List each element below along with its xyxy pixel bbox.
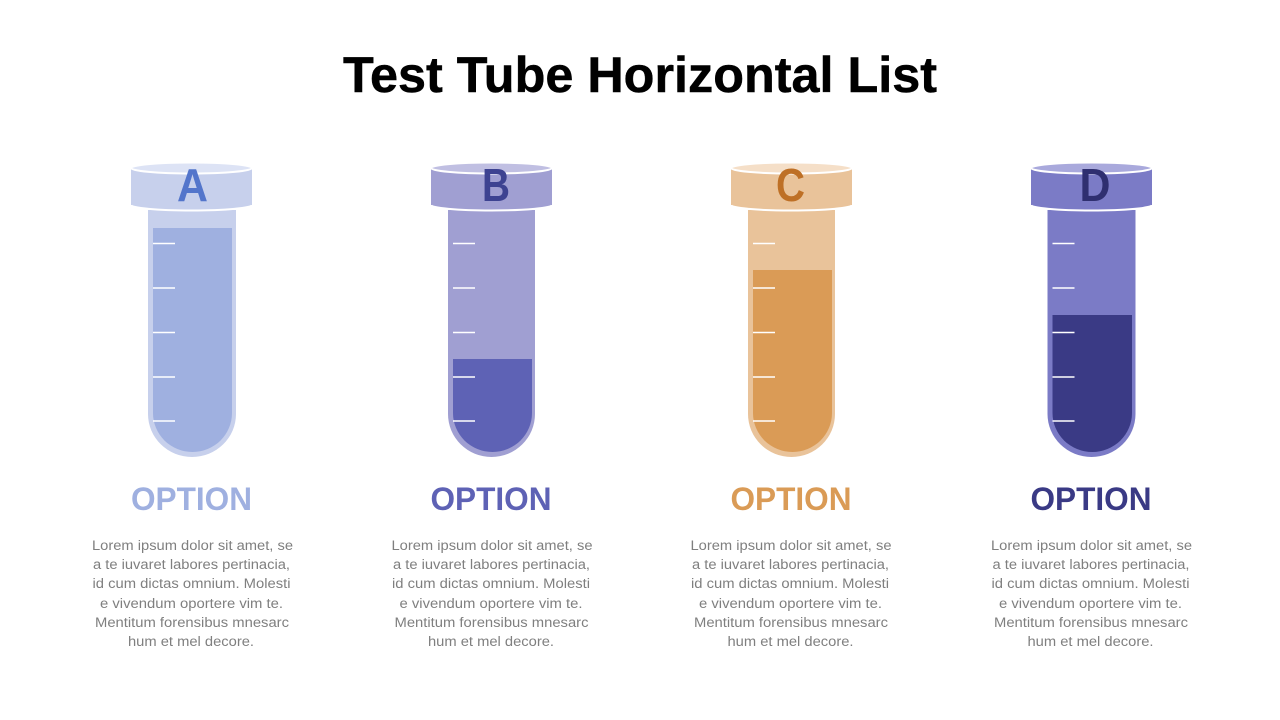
panel: option B	[392, 159, 592, 649]
text block D: hum et mel decore.	[1028, 634, 1154, 649]
test tube D: D	[1080, 159, 1110, 211]
text block C: Mentitum forensibus mnesarc	[694, 615, 888, 630]
text block A: a te iuvaret labores pertinacia,	[93, 557, 290, 572]
text block B: a te iuvaret labores pertinacia,	[393, 557, 590, 572]
test tube A: A	[177, 159, 208, 211]
text block A: hum et mel decore.	[128, 634, 254, 649]
text block D	[991, 538, 1192, 649]
text block A: id cum dictas omnium. Molesti	[92, 576, 291, 591]
text block D: Lorem ipsum dolor sit amet, se	[991, 538, 1192, 553]
test tube C: C	[776, 159, 805, 211]
text block A: Lorem ipsum dolor sit amet, se	[92, 538, 293, 553]
test tube C	[731, 159, 852, 457]
text block D: id cum dictas omnium. Molesti	[992, 576, 1190, 591]
panel: option D	[991, 159, 1192, 649]
text block A: e vivendum oportere vim te.	[100, 596, 283, 611]
heading B: OPTION	[430, 481, 552, 517]
text block C: e vivendum oportere vim te.	[699, 596, 882, 611]
test tube B: B	[482, 159, 510, 211]
text block C: Lorem ipsum dolor sit amet, se	[690, 538, 892, 553]
heading A: OPTION	[131, 481, 252, 517]
text block A	[92, 538, 293, 649]
panel: option A	[92, 159, 293, 649]
text block A: Mentitum forensibus mnesarc	[95, 615, 289, 630]
text block B: e vivendum oportere vim te.	[400, 596, 582, 611]
title: Test Tube Horizontal List	[343, 47, 937, 103]
heading C: OPTION	[730, 481, 852, 517]
text block B: Lorem ipsum dolor sit amet, se	[392, 538, 592, 553]
text block D: e vivendum oportere vim te.	[999, 596, 1182, 611]
text block B: Mentitum forensibus mnesarc	[394, 615, 589, 630]
text block C	[690, 538, 892, 649]
text block D: a te iuvaret labores pertinacia,	[992, 557, 1190, 572]
text block B: id cum dictas omnium. Molesti	[392, 576, 590, 591]
text block C: a te iuvaret labores pertinacia,	[692, 557, 889, 572]
text block C: id cum dictas omnium. Molesti	[691, 576, 889, 591]
test tube A	[131, 159, 252, 457]
text block C: hum et mel decore.	[728, 634, 854, 649]
panel: option C	[690, 159, 892, 649]
text block B	[392, 538, 592, 649]
heading D: OPTION	[1030, 481, 1152, 517]
text block B: hum et mel decore.	[428, 634, 554, 649]
text block D: Mentitum forensibus mnesarc	[994, 615, 1188, 630]
test tube D	[1031, 159, 1152, 457]
test tube B	[431, 159, 552, 457]
